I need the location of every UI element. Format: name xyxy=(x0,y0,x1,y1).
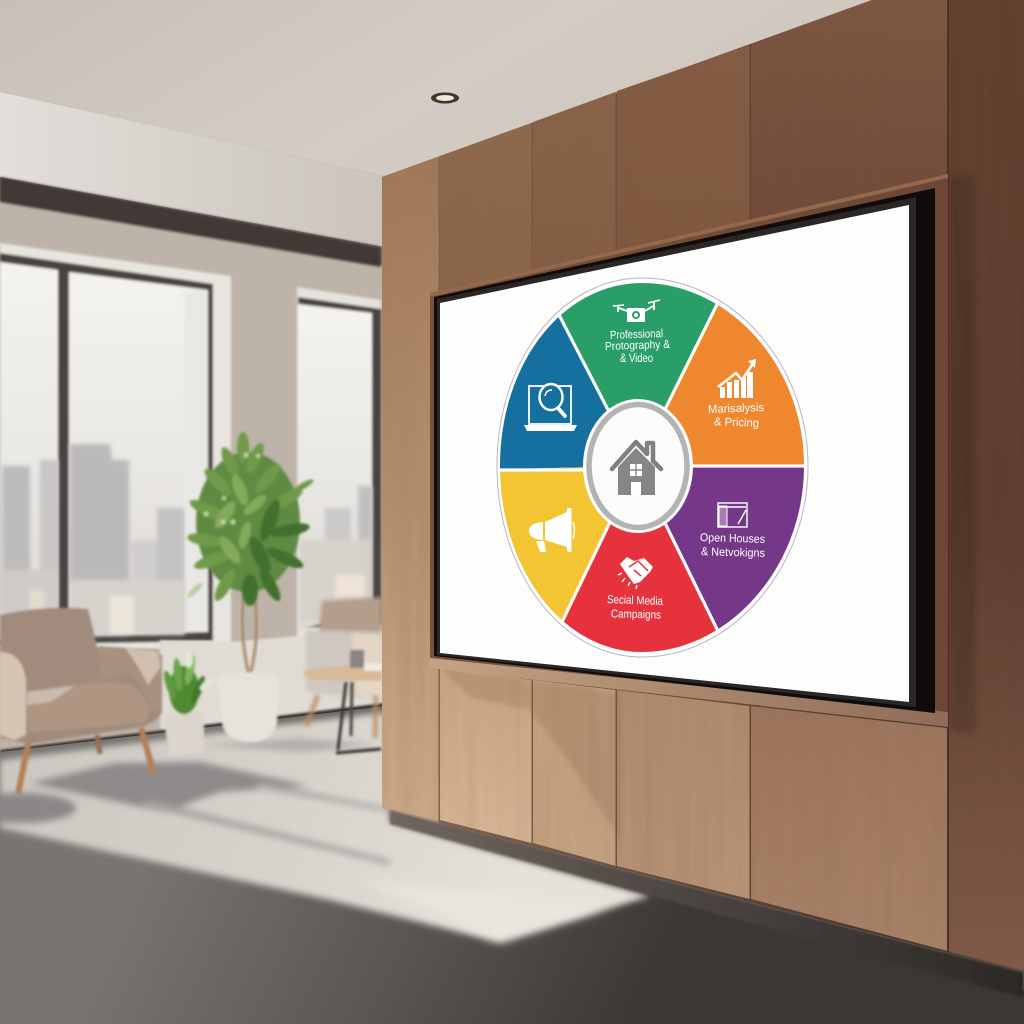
floor xyxy=(0,706,1024,1024)
dark ceiling beam xyxy=(0,177,381,267)
blurred skyline in left window xyxy=(0,444,185,638)
icon: drone xyxy=(613,300,660,322)
label: professional photography: Professional xyxy=(610,328,663,342)
small potted plant xyxy=(162,652,216,756)
label: professional photography xyxy=(605,328,671,365)
floor glow xyxy=(360,880,610,940)
TV wood frame xyxy=(430,174,948,727)
TV inner bezel edge xyxy=(437,197,916,707)
cast shadow on lower panels xyxy=(440,668,620,840)
ceiling soffit xyxy=(0,92,385,247)
label: social media campaigns: Secial Media xyxy=(607,594,664,608)
floor shadows xyxy=(0,738,390,865)
plant pot xyxy=(217,672,279,742)
skirting strip xyxy=(0,703,385,757)
wall base behind panel seams xyxy=(382,0,1024,972)
right window xyxy=(297,287,381,650)
wheel segments xyxy=(500,283,804,652)
label: market analysis and pricing: Marisalysis xyxy=(708,402,764,416)
foreground armchair xyxy=(0,608,162,794)
label: open houses and networking xyxy=(700,532,765,560)
right background armchair xyxy=(306,597,382,738)
shadow beside the frame xyxy=(949,175,975,735)
icon: house xyxy=(612,442,661,495)
wood wall panels xyxy=(382,0,1024,972)
frame lower lip xyxy=(430,658,948,727)
recessed ceiling light xyxy=(431,92,459,104)
label: market analysis and pricing xyxy=(708,402,764,430)
lower wall and sill xyxy=(160,628,385,730)
label: professional photography: Protography & xyxy=(605,339,671,353)
wheel diagram xyxy=(496,278,808,658)
label: social media campaigns xyxy=(607,594,664,622)
side table with cup xyxy=(304,650,382,753)
blurred skyline in right window xyxy=(300,486,372,620)
label: open houses and networking: & Netvokigns xyxy=(701,546,765,560)
left window xyxy=(0,243,231,650)
ceiling xyxy=(0,0,874,176)
tall potted plant xyxy=(186,432,315,742)
back wall xyxy=(0,200,385,760)
label: professional photography: & Video xyxy=(620,353,653,365)
frame top highlight xyxy=(430,174,948,297)
label: open houses and networking: Open Houses xyxy=(700,532,765,546)
TV black bezel xyxy=(434,188,935,713)
wheel outer ring xyxy=(497,278,808,657)
icon: open house flyer xyxy=(718,503,747,527)
lower panels xyxy=(440,668,532,843)
plant trunk xyxy=(242,585,257,676)
baseboard xyxy=(390,810,1024,998)
label: social media campaigns: Campaigns xyxy=(611,608,661,622)
sunlit floor xyxy=(0,712,650,942)
plant foliage xyxy=(186,432,315,606)
hub circle xyxy=(583,399,693,533)
icon: megaphone xyxy=(529,508,574,552)
icon: bar chart with arrow xyxy=(718,359,756,398)
TV screen xyxy=(440,205,909,702)
icon: laptop with magnifier xyxy=(524,384,577,431)
wood grain xyxy=(468,762,648,828)
upper and side panels xyxy=(382,157,438,825)
label: market analysis and pricing: & Pricing xyxy=(714,416,759,430)
icon: handshake xyxy=(618,557,653,589)
